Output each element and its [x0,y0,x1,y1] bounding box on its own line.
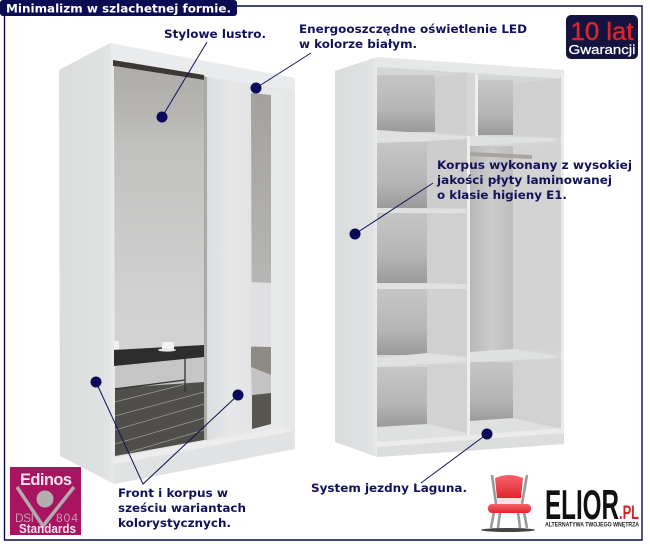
right edge [561,72,564,434]
side panel [59,43,114,484]
cups [114,341,119,349]
reflected rug [115,382,204,456]
callout: LED lighting: Energooszczędne oświetlenie LED [299,22,527,36]
reflected floor [115,355,204,389]
reflected table [114,345,204,366]
top band [377,57,564,80]
front base [113,60,295,484]
title banner: Minimalizm w szlachetnej formie. [6,2,231,16]
Edinos standards badge: 804 [56,511,78,525]
callout: rail system: System jezdny Laguna. [311,481,467,495]
warranty badge: 10 lat [570,18,634,46]
base [377,433,564,457]
top rail [113,60,204,80]
callout leader lines [96,42,487,484]
interior base [377,67,564,457]
callout: colour variants [118,486,246,530]
callout: LED lighting: w kolorze białym. [299,37,417,51]
side panel [335,57,377,457]
callout: mirror: Stylowe lustro. [164,27,266,41]
callout: body material [436,158,632,202]
callout: colour variants: kolorystycznych. [118,516,231,530]
center divider [467,136,470,436]
open wardrobe interior view [335,57,564,457]
Edinos standards badge: Edinos [20,471,72,489]
callout: colour variants: sześciu wariantach [118,501,246,515]
callout: body material: Korpus wykonany z wysokiej [437,158,632,172]
Edinos standards badge [10,467,81,536]
left mirror [114,66,204,457]
door frame right [271,90,283,430]
plinth [113,431,295,484]
left column compartments [377,72,467,433]
right column compartments [470,78,561,428]
right mirror [251,93,271,429]
callout dots [90,82,492,440]
top front band [110,43,295,91]
shelves left [377,130,467,442]
callout: colour variants: Front i korpus w [118,486,228,500]
callout: body material: jakości płyty laminowanej [436,173,612,187]
icon: red chair [481,475,535,532]
logo: Elior.pl: .PL [619,503,639,524]
wardrobe with mirrored doors [59,43,295,484]
Edinos standards badge: DSI [15,511,34,525]
warranty badge [566,15,638,59]
center door [207,77,252,440]
shelves right [470,136,557,435]
warranty badge: Gwarancji [568,42,636,57]
callout: body material: o klasie higieny E1. [437,188,567,202]
callout: LED lighting [299,22,527,51]
Edinos standards badge: Standards [19,522,76,536]
hanging rail [470,152,532,159]
